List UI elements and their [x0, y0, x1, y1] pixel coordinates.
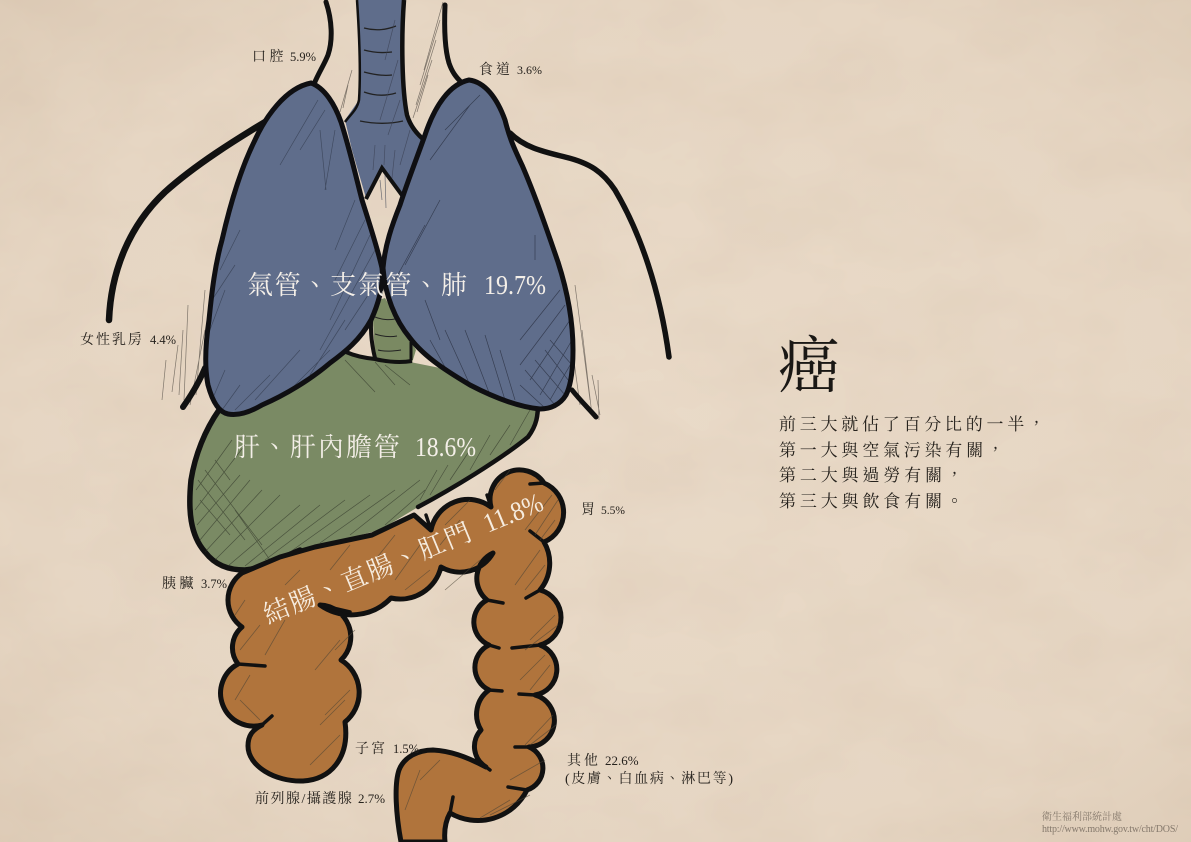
- label: oral cavity: 5.9%: [290, 50, 316, 64]
- label: colon, rectum, anus: 11.8%: [479, 487, 547, 538]
- trachea and bronchi: [345, 0, 424, 208]
- right lung: [383, 80, 573, 409]
- label: esophagus: 食道: [479, 63, 513, 78]
- sketch strokes around organs: [162, 2, 600, 420]
- label: stomach: 胃: [581, 503, 595, 518]
- label: prostate: 2.7%: [358, 791, 385, 806]
- label: others: 其他: [567, 754, 601, 769]
- colon: [221, 470, 564, 842]
- description text: 第一大與空氣污染有關，: [779, 441, 1004, 460]
- description text: [779, 415, 1045, 511]
- description text: 第二大與過勞有關，: [779, 466, 963, 485]
- label: uterus: 子宮: [355, 742, 387, 757]
- colon folds: [238, 483, 544, 813]
- label: others: 22.6%: [605, 753, 639, 768]
- label: colon, rectum, anus: [259, 487, 547, 630]
- left lung: [206, 83, 382, 415]
- label: female breast: 女性乳房: [80, 333, 144, 348]
- label: trachea, bronchi, lung: 19.7%: [484, 270, 546, 300]
- colon hatching: [235, 470, 558, 818]
- label: uterus: 1.5%: [393, 742, 419, 756]
- label: female breast: 4.4%: [150, 333, 176, 347]
- label: others detail: (皮膚、白血病、淋巴等): [565, 770, 733, 787]
- label: esophagus: 3.6%: [517, 63, 542, 77]
- label: liver: [234, 432, 476, 462]
- label: prostate: 前列腺/攝護腺: [255, 792, 353, 807]
- esophagus and vessel lines: [109, 2, 669, 417]
- label: colon, rectum, anus: 結腸、直腸、肛門: [259, 518, 475, 630]
- label: liver: 肝、肝內膽管: [234, 433, 400, 462]
- description text: 前三大就佔了百分比的一半，: [779, 415, 1045, 434]
- source credit: [1042, 810, 1178, 835]
- small organ labels: [80, 49, 733, 807]
- liver: [190, 352, 538, 570]
- source credit: http://www.mohw.gov.tw/cht/DOS/: [1042, 824, 1178, 835]
- label: pancreas: 3.7%: [201, 577, 227, 591]
- label: trachea, bronchi, lung: 氣管、支氣管、肺: [247, 271, 467, 300]
- label: pancreas: 胰臟: [162, 577, 197, 592]
- label: liver: 18.6%: [415, 432, 476, 462]
- title: 癌: [778, 333, 840, 401]
- liver hatching: [195, 360, 530, 566]
- label: stomach: 5.5%: [601, 505, 625, 517]
- esophagus segment between lungs: [371, 298, 416, 363]
- description text: 第三大與飲食有關。: [779, 492, 963, 511]
- label: oral cavity: 口腔: [252, 50, 287, 65]
- source credit: 衛生福利部統計處: [1042, 810, 1122, 823]
